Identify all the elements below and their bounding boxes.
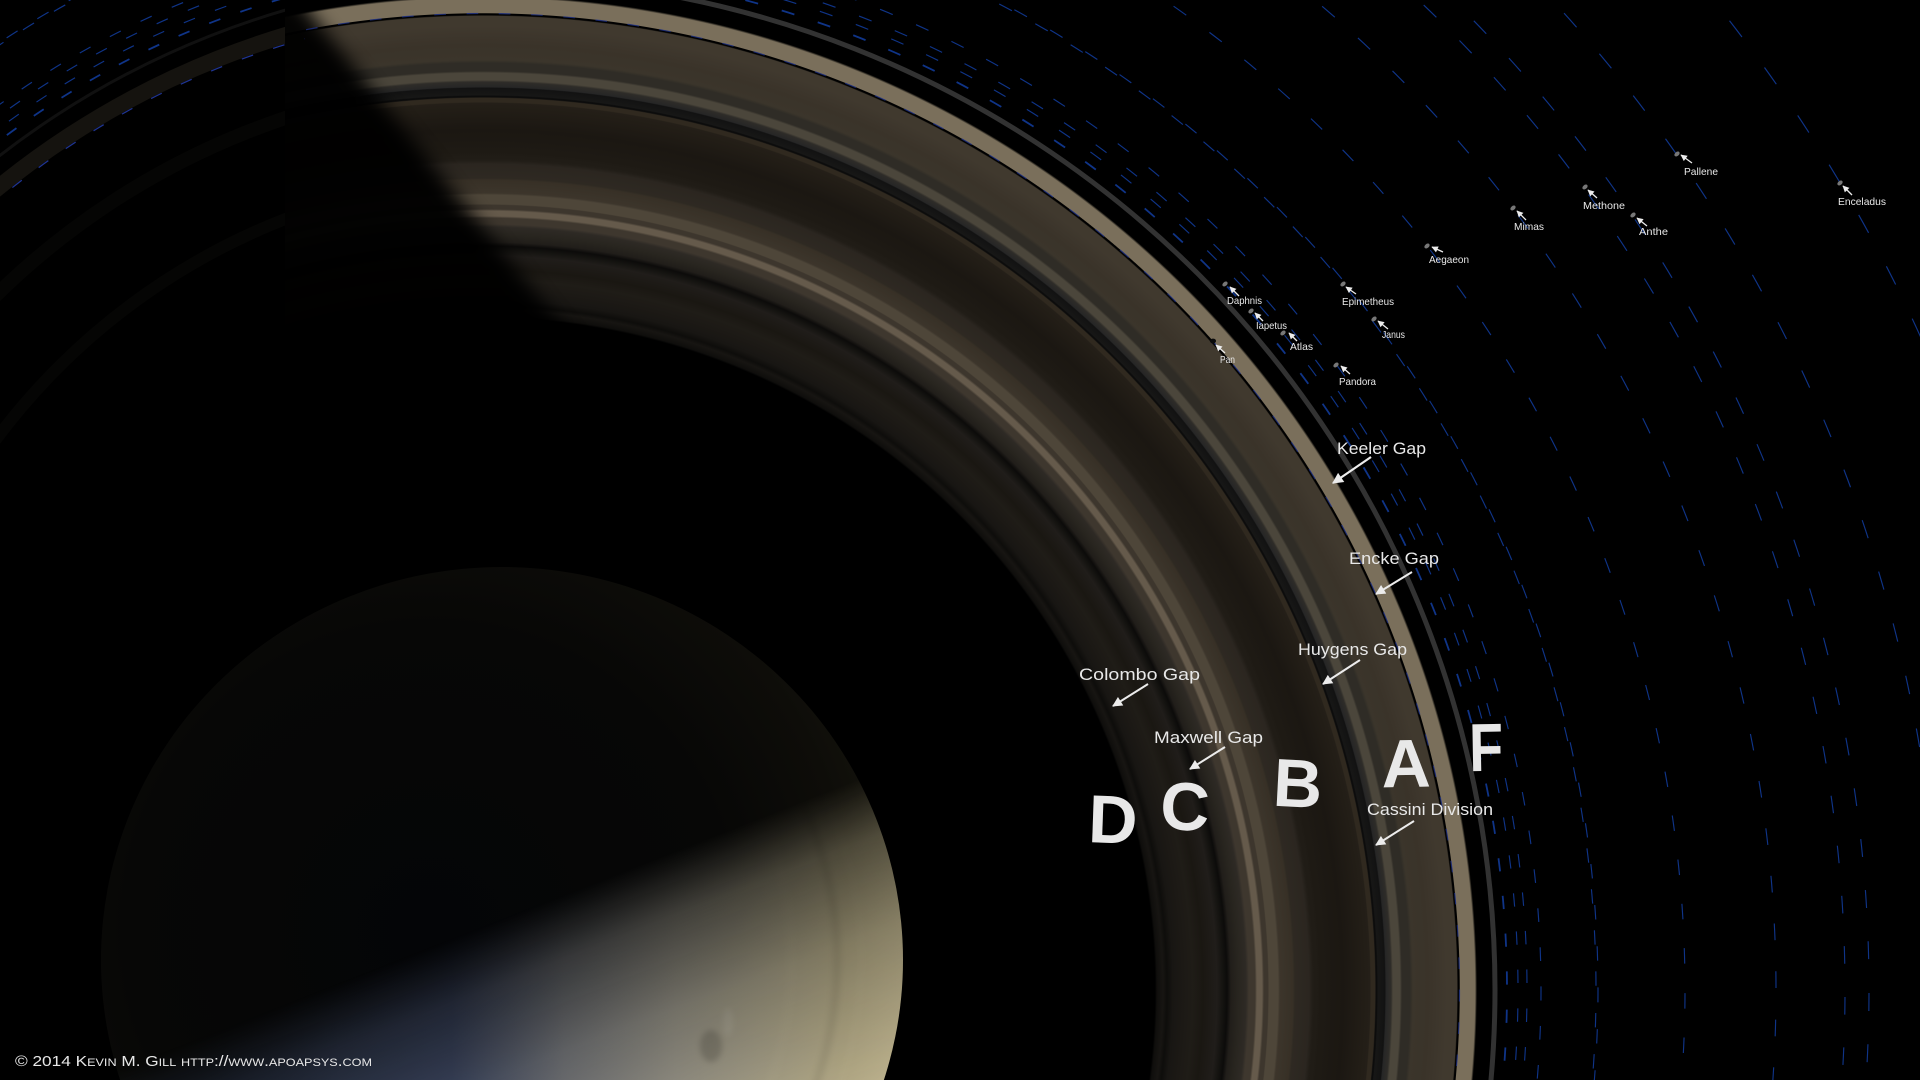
moon: Enceladus — [1836, 180, 1886, 208]
label: Encke Gap: Encke Gap — [1349, 549, 1439, 568]
moon: Mimas — [1509, 205, 1544, 233]
moon orbit dashes — [745, 0, 1920, 1080]
moon: Atlas: Atlas — [1290, 341, 1313, 353]
label: Huygens Gap: Huygens Gap — [1298, 640, 1407, 659]
moon: Pallene: Pallene — [1684, 166, 1718, 178]
label: Maxwell Gap — [1154, 728, 1263, 769]
moon: Janus — [1370, 316, 1405, 341]
moon: Pan: Pan — [1220, 354, 1235, 366]
planet: Saturn — [101, 567, 903, 1080]
label: Colombo Gap: Colombo Gap — [1079, 665, 1200, 684]
moon: Methone: Methone — [1583, 200, 1625, 212]
moon: Janus: Janus — [1382, 329, 1405, 341]
moon: Anthe — [1629, 212, 1668, 238]
ring letter B: B — [1271, 745, 1324, 823]
moon orbit dashes, upper left — [0, 0, 280, 136]
label: Encke Gap — [1349, 549, 1439, 594]
moon: Iapetus — [1247, 308, 1287, 332]
label: Cassini Division — [1367, 800, 1493, 845]
moon: Epimetheus — [1339, 281, 1394, 308]
ring letter C: C — [1158, 768, 1211, 846]
label: Maxwell Gap: Maxwell Gap — [1154, 728, 1263, 747]
ring system, sunlit side — [294, 0, 1498, 1080]
ring letter A: A — [1381, 726, 1431, 802]
label: Colombo Gap — [1079, 665, 1200, 706]
moon: Pandora: Pandora — [1339, 376, 1376, 388]
copyright credit: © 2014 Kevin M. Gill http://www.apoapsys.com — [15, 1053, 372, 1070]
moon: Aegaeon: Aegaeon — [1429, 254, 1469, 266]
moon: Daphnis — [1221, 281, 1262, 307]
moon: Daphnis: Daphnis — [1227, 295, 1262, 307]
moon: Pallene — [1673, 151, 1718, 178]
label: Keeler Gap: Keeler Gap — [1337, 439, 1426, 458]
moon: Mimas: Mimas — [1514, 221, 1544, 233]
moon: Aegaeon — [1423, 243, 1469, 266]
ring letter D: D — [1087, 781, 1139, 859]
moon: Enceladus: Enceladus — [1838, 196, 1886, 208]
ring letters — [1087, 710, 1504, 859]
ring system, far-left shadowed side — [0, 9, 285, 196]
label: Cassini Division: Cassini Division — [1367, 800, 1493, 819]
moon: Pandora — [1332, 362, 1376, 388]
Saturn's shadow across the rings — [0, 0, 637, 1080]
moon: Atlas — [1279, 330, 1313, 353]
Keeler gap blue dashes — [0, 9, 1460, 1080]
ring letter F: F — [1468, 710, 1504, 786]
label: Keeler Gap — [1333, 439, 1426, 483]
moon: Methone — [1581, 184, 1625, 212]
moon: Epimetheus: Epimetheus — [1342, 296, 1394, 308]
moon: Iapetus: Iapetus — [1256, 320, 1287, 332]
moon: Pan — [1210, 339, 1235, 366]
label: Huygens Gap — [1298, 640, 1407, 684]
moon: Anthe: Anthe — [1639, 226, 1668, 238]
